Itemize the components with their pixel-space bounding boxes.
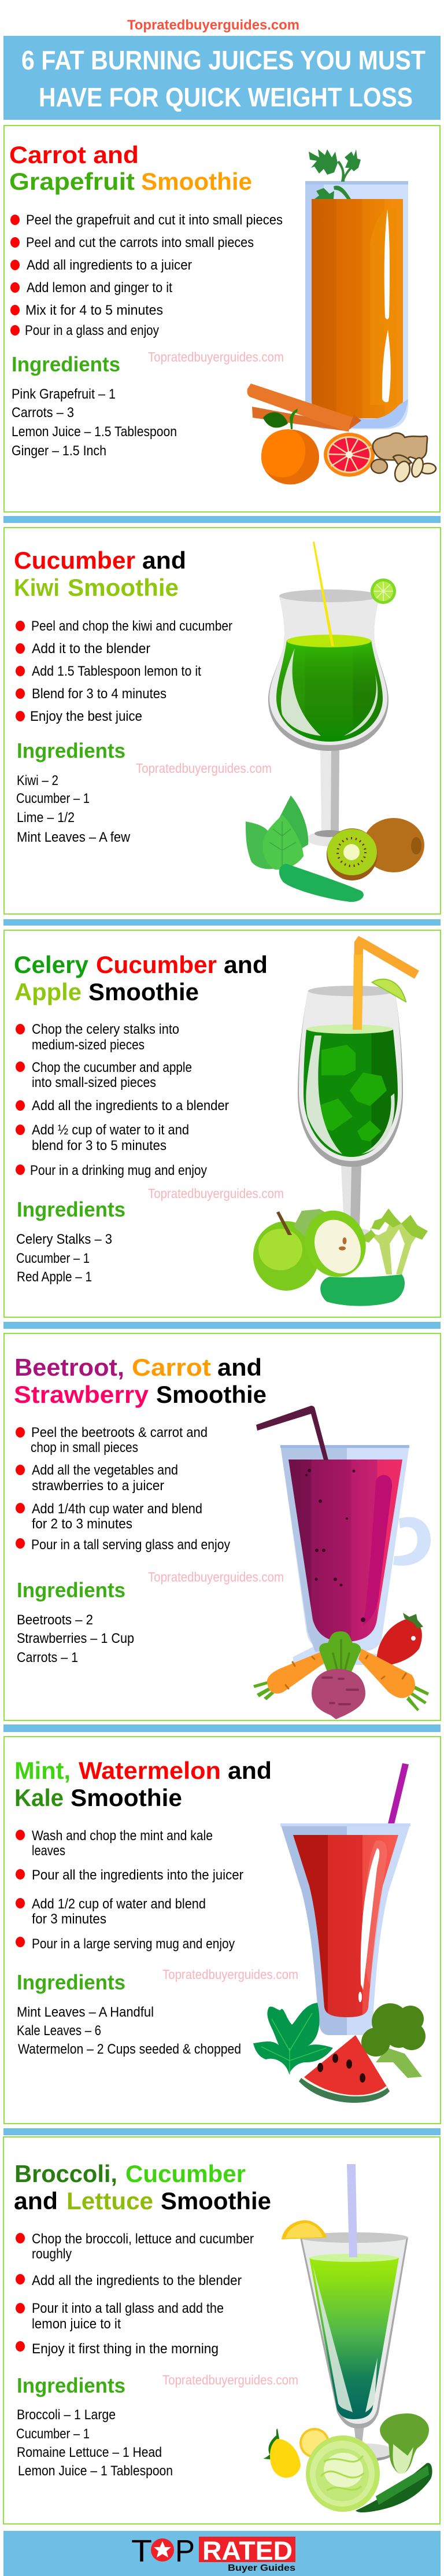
heading: Celery xyxy=(14,951,89,978)
illustration: beet smoothie mug xyxy=(253,1406,431,1719)
icon: cucumber xyxy=(279,864,364,902)
logo: top rated: P xyxy=(175,2534,195,2568)
panel: carrot and grapefruit smoothie xyxy=(4,126,440,512)
steps: medium-sized pieces xyxy=(32,1037,145,1053)
panel: broccoli cucumber and lettuce smoothie xyxy=(3,2137,440,2524)
panel: beetroot carrot and strawberry smoothie xyxy=(4,1333,441,1720)
heading: Kiwi xyxy=(14,574,60,601)
icon: parsley xyxy=(309,149,361,199)
ingredients heading: Ingredients xyxy=(17,739,125,762)
steps: roughly xyxy=(32,2246,72,2262)
heading: and xyxy=(228,1757,272,1784)
icon: cucumber xyxy=(356,2463,432,2512)
icon: beet xyxy=(319,1631,361,1672)
steps: Pour all the ingredients into the juicer xyxy=(32,1867,243,1883)
steps: strawberries to a juicer xyxy=(32,1478,164,1494)
heading: Kale xyxy=(14,1784,64,1811)
icon: lemon slice xyxy=(299,2428,330,2458)
ingredients list: Carrots – 1 xyxy=(17,1650,78,1665)
steps: Enjoy the best juice xyxy=(30,709,142,724)
ingredients list: Cucumber – 1 xyxy=(16,791,90,806)
steps: chop in small pieces xyxy=(31,1440,138,1455)
steps: Peel the beetroots & carrot and xyxy=(31,1425,208,1440)
ingredients list: Lemon Juice – 1 Tablespoon xyxy=(18,2463,173,2479)
steps: for 2 to 3 minutes xyxy=(32,1516,132,1532)
ingredients list xyxy=(16,773,131,845)
steps: into small-sized pieces xyxy=(32,1075,156,1090)
steps xyxy=(16,618,232,724)
icon: carrots xyxy=(253,1681,429,1711)
heading: Carrot and xyxy=(9,141,139,168)
ingredients list xyxy=(12,386,177,459)
heading: and xyxy=(224,951,268,978)
ingredients heading: Ingredients xyxy=(17,1197,125,1221)
ingredients list: Lime – 1/2 xyxy=(17,810,75,826)
ingredients list: Carrots – 3 xyxy=(12,405,74,421)
steps: Enjoy it first thing in the morning xyxy=(32,2341,219,2357)
icon: watermelon xyxy=(299,2035,390,2101)
ingredients list: Cucumber – 1 xyxy=(16,2426,90,2442)
icon: grapefruit slice xyxy=(324,433,375,477)
steps: Add ½ cup of water to it and xyxy=(32,1122,189,1138)
steps: for 3 minutes xyxy=(32,1911,106,1927)
heading: Beetroot, xyxy=(14,1354,124,1381)
ingredients list xyxy=(17,2004,241,2057)
heading xyxy=(9,141,252,195)
section divider xyxy=(3,1322,441,1329)
icon: celery xyxy=(358,1208,428,1274)
steps: Add it to the blender xyxy=(32,641,150,657)
ingredients list: Strawberries – 1 Cup xyxy=(17,1631,134,1646)
ingredients list: Kiwi – 2 xyxy=(17,773,58,788)
icon: lettuce xyxy=(380,2413,429,2474)
steps: Add 1/4th cup water and blend xyxy=(32,1501,202,1517)
heading: Smoothie xyxy=(161,2187,271,2214)
title banner xyxy=(3,36,441,120)
steps xyxy=(16,1022,229,1178)
steps xyxy=(16,1828,243,1952)
icon: straw xyxy=(313,541,334,646)
heading xyxy=(14,2160,271,2214)
steps: Blend for 3 to 4 minutes xyxy=(32,686,166,702)
icon: kiwi xyxy=(363,818,424,872)
ingredients heading: Ingredients xyxy=(12,352,120,376)
logo: top rated: Buyer Guides xyxy=(228,2563,295,2573)
specks xyxy=(305,1469,365,1622)
icon: cabbage xyxy=(306,2435,380,2512)
illustration: green juice glass xyxy=(253,936,428,1306)
steps: Add lemon and ginger to it xyxy=(27,280,172,296)
ingredients list: Beetroots – 2 xyxy=(17,1612,93,1628)
logo: top rated xyxy=(131,2534,295,2573)
ingredients list: Lemon Juice – 1.5 Tablespoon xyxy=(12,424,177,440)
ingredients list xyxy=(17,1612,134,1665)
ingredients list: Ginger – 1.5 Inch xyxy=(12,443,106,459)
heading xyxy=(14,547,186,601)
icon: kale leaves xyxy=(253,2003,333,2074)
steps: Chop the broccoli, lettuce and cucumber xyxy=(32,2231,254,2247)
panel: celery cucumber and apple smoothie xyxy=(4,930,441,1317)
steps: Add all ingredients to a juicer xyxy=(27,257,192,273)
ingredients list: Celery Stalks – 3 xyxy=(16,1232,112,1247)
heading: and xyxy=(14,2187,58,2214)
steps: Pour in a drinking mug and enjoy xyxy=(30,1163,207,1178)
steps: blend for 3 to 5 minutes xyxy=(32,1138,166,1154)
ingredients list: Cucumber – 1 xyxy=(16,1251,90,1266)
heading: and xyxy=(142,547,186,574)
heading xyxy=(14,1354,267,1408)
icon: star xyxy=(154,2541,171,2557)
steps: Mix it for 4 to 5 minutes xyxy=(25,303,163,318)
heading xyxy=(14,951,268,1005)
watermark: Topratedbuyerguides.com xyxy=(148,349,284,364)
ingredients list: Pink Grapefruit – 1 xyxy=(12,386,116,402)
ingredients list: Kale Leaves – 6 xyxy=(17,2023,101,2039)
section divider xyxy=(3,516,441,523)
ingredients list: Watermelon – 2 Cups seeded & chopped xyxy=(18,2041,241,2057)
icon: lemon wedge xyxy=(282,2220,327,2239)
heading: Smoothie xyxy=(141,168,252,195)
heading: Carrot xyxy=(132,1354,211,1381)
heading xyxy=(14,1757,272,1811)
illustration: green layered glass xyxy=(263,2164,432,2512)
heading: Cucumber xyxy=(14,547,135,574)
heading: Broccoli, xyxy=(14,2160,117,2187)
ingredients heading: Ingredients xyxy=(17,1970,125,1994)
ingredients list: Red Apple – 1 xyxy=(17,1269,92,1285)
icon: mint leaves xyxy=(278,795,308,856)
steps: Pour in a glass and enjoy xyxy=(25,323,159,338)
ingredients heading: Ingredients xyxy=(17,1578,125,1602)
steps: Wash and chop the mint and kale xyxy=(32,1828,213,1844)
icon: apple xyxy=(253,1221,319,1291)
watermark: Topratedbuyerguides.com xyxy=(136,761,272,776)
heading: Cucumber xyxy=(125,2160,246,2187)
section divider xyxy=(3,2128,441,2135)
illustration: orange juice glass xyxy=(247,149,436,485)
panel: mint watermelon and kale smoothie xyxy=(4,1737,441,2124)
steps: Add 1/2 cup of water and blend xyxy=(32,1896,206,1912)
heading: Smoothie xyxy=(71,1784,182,1811)
illustration: green juice goblet xyxy=(246,541,424,902)
ingredients list: Mint Leaves – A Handful xyxy=(17,2004,154,2020)
icon: straw xyxy=(384,1763,409,1841)
steps: Peel the grapefruit and cut it into small pieces xyxy=(26,212,283,228)
icon: ginger xyxy=(371,433,427,473)
steps: Chop the celery stalks into xyxy=(32,1022,179,1037)
steps: Peel and chop the kiwi and cucumber xyxy=(31,618,232,634)
panel: cucumber and kiwi smoothie xyxy=(4,528,441,914)
steps: Add all the vegetables and xyxy=(32,1462,178,1478)
heading: Smoothie xyxy=(88,978,199,1005)
watermark: Topratedbuyerguides.com xyxy=(148,1186,284,1201)
heading: Strawberry xyxy=(14,1381,149,1408)
steps xyxy=(10,212,283,338)
illustration: watermelon juice glass xyxy=(253,1763,426,2103)
icon: orange straw xyxy=(353,936,419,1030)
icon: carrot sticks xyxy=(252,407,349,432)
heading: Grapefruit xyxy=(9,168,135,195)
ingredients list: Broccoli – 1 Large xyxy=(17,2407,116,2423)
heading: Smoothie xyxy=(156,1381,267,1408)
icon: straw xyxy=(347,2164,357,2257)
ingredients list xyxy=(16,1232,112,1285)
steps: Add all the ingredients to the blender xyxy=(32,2273,242,2288)
icon: mug handle xyxy=(393,1517,431,1566)
steps xyxy=(16,1425,230,1553)
heading: Cucumber xyxy=(96,951,217,978)
heading: Smoothie xyxy=(68,574,179,601)
ingredients list xyxy=(16,2407,173,2479)
watermark: Topratedbuyerguides.com xyxy=(162,1967,298,1982)
icon: straw xyxy=(256,1406,328,1460)
icon: lime slice xyxy=(371,578,396,604)
logo: top rated: T xyxy=(131,2534,152,2568)
heading: Apple xyxy=(14,978,82,1005)
ingredients list: Romaine Lettuce – 1 Head xyxy=(17,2445,162,2460)
title xyxy=(21,45,426,112)
heading: Mint, xyxy=(14,1757,71,1784)
footer xyxy=(3,2531,441,2576)
ice cubes xyxy=(312,1045,387,1141)
steps: Chop the cucumber and apple xyxy=(32,1060,192,1075)
icon: lemon xyxy=(263,2428,279,2460)
section divider xyxy=(3,919,441,926)
steps: Add all the ingredients to a blender xyxy=(32,1098,229,1114)
ingredients heading: Ingredients xyxy=(17,2374,125,2397)
site name: Topratedbuyerguides.com xyxy=(127,17,299,33)
steps: leaves xyxy=(32,1843,65,1859)
steps: Pour it into a tall glass and add the xyxy=(32,2301,224,2316)
icon: orange xyxy=(261,429,319,485)
steps: Add 1.5 Tablespoon lemon to it xyxy=(32,664,201,679)
icon: lime wedge xyxy=(371,979,408,1002)
watermark: Topratedbuyerguides.com xyxy=(162,2372,298,2387)
steps: Pour in a large serving mug and enjoy xyxy=(32,1936,235,1952)
heading: and xyxy=(217,1354,262,1381)
icon: strawberry xyxy=(376,1619,422,1666)
watermark: Topratedbuyerguides.com xyxy=(148,1569,284,1584)
icon: cucumber xyxy=(320,1274,405,1306)
steps: Pour in a tall serving glass and enjoy xyxy=(31,1537,230,1553)
heading: Lettuce xyxy=(66,2187,153,2214)
ingredients list: Mint Leaves – A few xyxy=(17,830,131,845)
section divider xyxy=(3,1724,441,1732)
heading: Watermelon xyxy=(79,1757,221,1784)
logo: top rated: RATED xyxy=(202,2536,293,2566)
steps xyxy=(16,2231,254,2357)
steps: Peel and cut the carrots into small pieces xyxy=(26,235,254,250)
steps: lemon juice to it xyxy=(32,2316,121,2332)
icon: broccoli xyxy=(376,2048,422,2078)
